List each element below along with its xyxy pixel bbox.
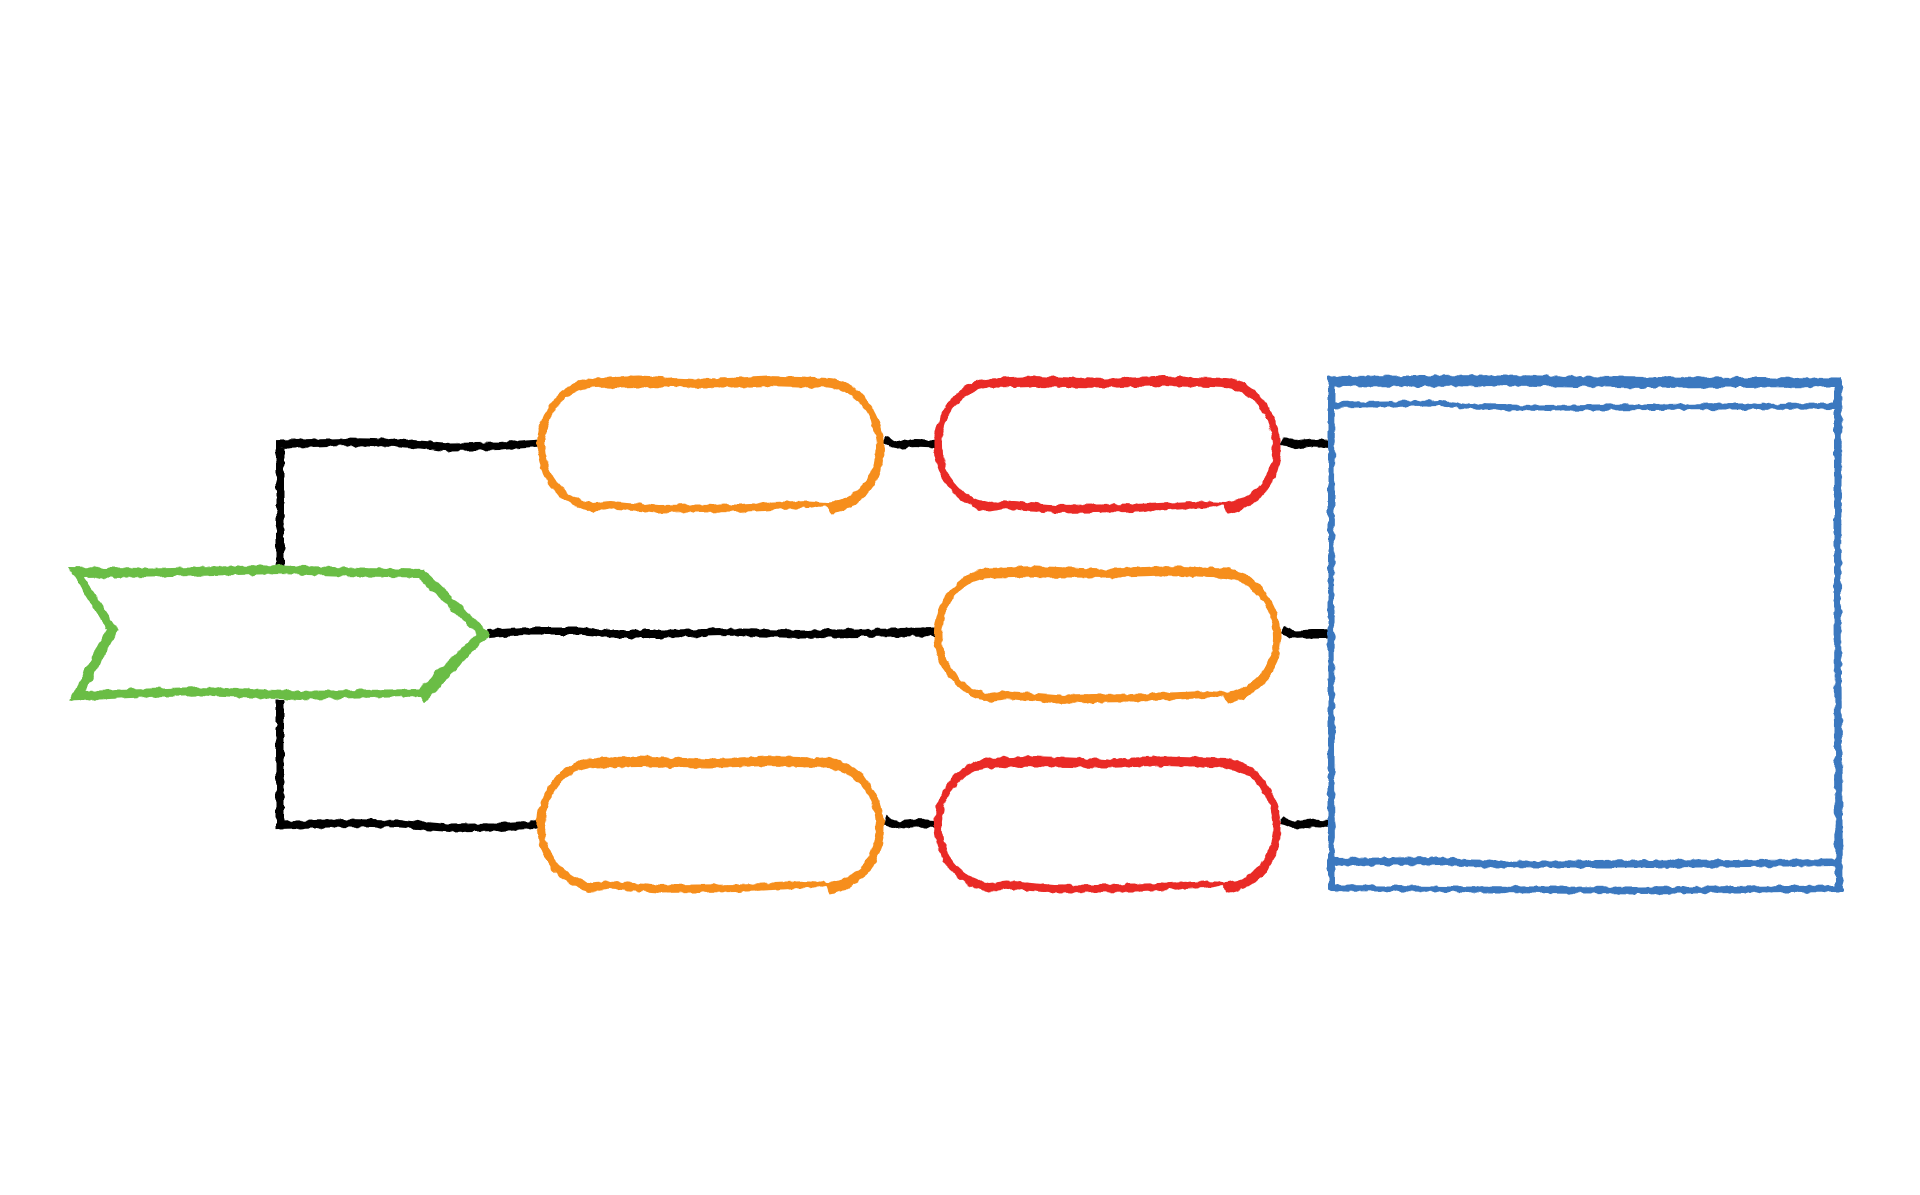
connectors: between pills, middle row [1282, 630, 1331, 635]
connector: arrow to middle pill [488, 631, 936, 634]
red pill: bottom right [934, 756, 1281, 894]
orange pill: middle right [934, 566, 1281, 704]
connector: arrow to top branch [280, 442, 540, 569]
orange pill: top left [537, 376, 884, 514]
connector: arrow to bottom branch [280, 700, 540, 828]
red pill: top right [934, 376, 1281, 514]
connectors: between pills, bottom row [884, 820, 1331, 825]
orange pill: bottom left [537, 756, 884, 894]
connectors: between pills, top row [884, 440, 1331, 445]
blue panel [1328, 375, 1843, 894]
header rule [1332, 400, 1836, 411]
green arrow banner [68, 565, 490, 703]
footer rule [1332, 857, 1838, 868]
